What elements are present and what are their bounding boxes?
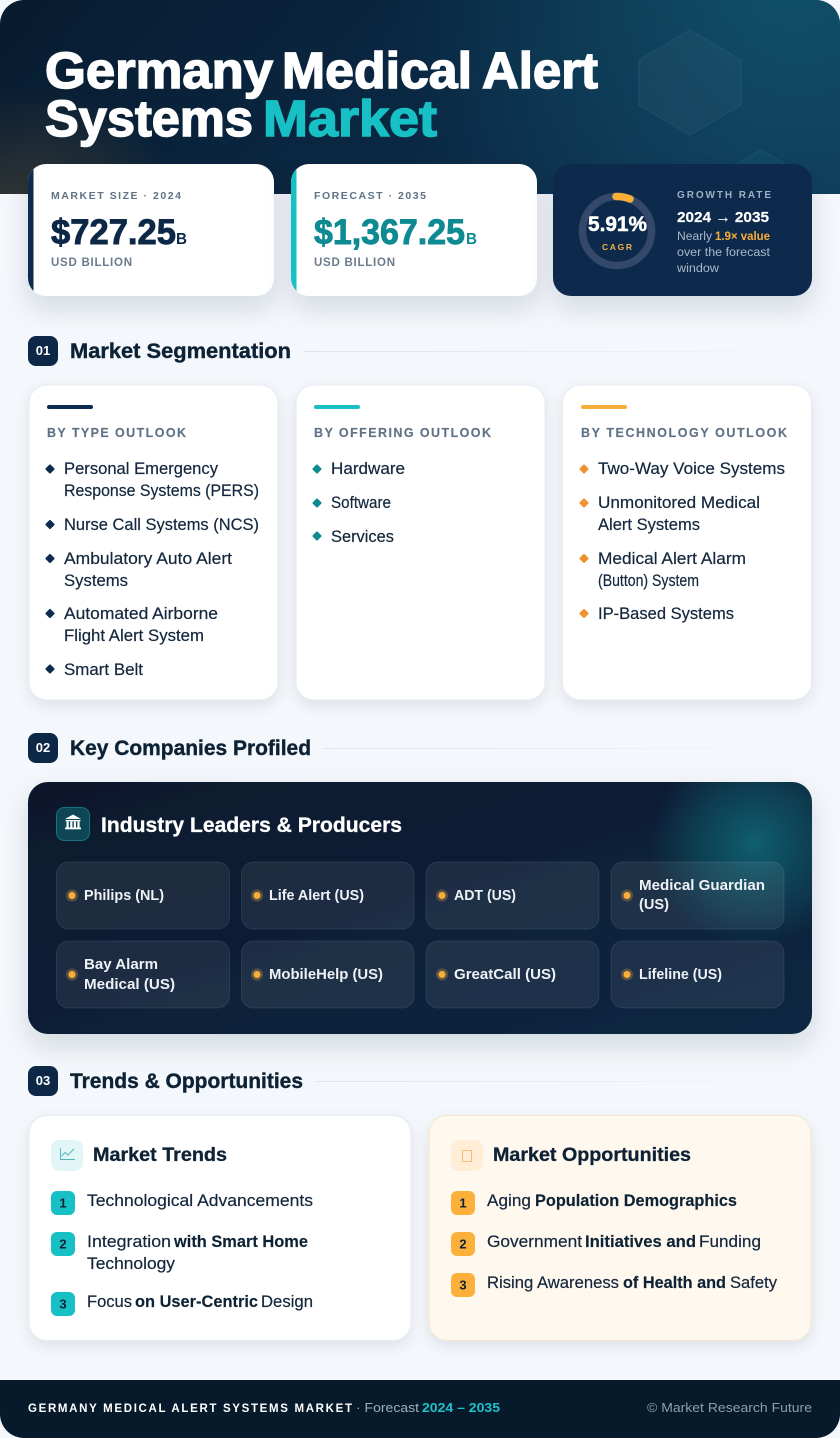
panel: market trends: Market Trends (93, 1145, 227, 1166)
header banner (0, 0, 840, 194)
section heading 01: Market Segmentation (70, 339, 291, 363)
company tile: Life Alert: Life Alert (US) (269, 887, 364, 904)
section heading 03: 03 (36, 1073, 50, 1088)
company tile: ADT: ADT (US) (454, 887, 516, 904)
opportunity 3: of Health and (623, 1274, 726, 1292)
panel: by offering outlook: Services (331, 528, 394, 546)
footer: GERMANY MEDICAL ALERT SYSTEMS MARKET (28, 1403, 352, 1415)
trend 3: Design (261, 1293, 313, 1311)
stat card: market size 2024: $727.25 (51, 213, 176, 252)
panel: by technology outlook: Medical Alert Alarm (598, 550, 746, 568)
section heading 03: Trends & Opportunities (70, 1069, 303, 1093)
trend 3: Focus (87, 1293, 132, 1311)
opportunity 2: Government (487, 1233, 582, 1251)
trend 2 (51, 1232, 308, 1273)
growth text: window (676, 263, 720, 275)
panel: market trends (29, 1116, 411, 1340)
company tile: MobileHelp: MobileHelp (US) (269, 966, 383, 983)
growth text: GROWTH RATE (677, 190, 771, 201)
opportunity 1 (451, 1191, 737, 1215)
trend 3: on User-Centric (135, 1293, 258, 1311)
title: Medical (282, 42, 472, 99)
footer: © Market Research Future (647, 1401, 812, 1415)
title: Alert (482, 42, 598, 99)
footer: 2024 – 2035 (422, 1401, 500, 1415)
panel: by technology outlook: IP-Based Systems (598, 605, 734, 623)
company tile: MobileHelp (242, 941, 414, 1008)
growth text: Nearly (677, 231, 712, 243)
section heading 01 (28, 336, 812, 366)
stat card: forecast 2035: $1,367.25 (314, 213, 465, 252)
opportunity 2: 2 (459, 1236, 467, 1252)
panel: by technology outlook: Two-Way Voice Systems (598, 460, 785, 478)
company tile: Bay Alarm Medical: Bay Alarm (84, 956, 158, 973)
decorative hexagon small (727, 150, 795, 194)
company tile: Bay Alarm Medical (56, 941, 230, 1008)
panel: by offering outlook: Hardware (331, 460, 405, 478)
stat card: market size 2024: USD BILLION (51, 257, 132, 269)
trend 3 (51, 1292, 313, 1316)
trend 3: 3 (59, 1296, 67, 1312)
company tile: GreatCall (426, 941, 599, 1008)
panel: by type outlook: Response Systems (PERS) (64, 482, 259, 500)
section heading 01: 01 (36, 343, 50, 358)
panel: by technology outlook: BY TECHNOLOGY OUTLOOK (581, 426, 787, 440)
panel: market opportunities: Market Opportunities (493, 1145, 691, 1166)
panel: by technology outlook: (Button) System (598, 572, 699, 590)
company tile: Philips: Philips (NL) (84, 887, 164, 904)
section heading 02 (28, 733, 812, 763)
growth text: 1.9× value (715, 231, 770, 243)
CAGR donut (582, 196, 652, 266)
panel: by technology outlook: Unmonitored Medical (598, 494, 760, 512)
company tile: GreatCall: GreatCall (US) (454, 966, 556, 983)
panel: by offering outlook: Software (331, 494, 391, 512)
panel: by type outlook: Flight Alert System (64, 627, 204, 645)
panel: market opportunities (429, 1116, 811, 1340)
trend 2: Integration (87, 1233, 171, 1251)
title (45, 42, 598, 147)
stat card: forecast 2035: FORECAST · 2035 (314, 190, 426, 202)
trend 2: with Smart Home (173, 1233, 308, 1251)
opportunity 1: 1 (459, 1196, 467, 1210)
trend 1 (51, 1191, 313, 1215)
company tile: Bay Alarm Medical: Medical (US) (84, 976, 175, 993)
trend 1: Technological Advancements (87, 1192, 313, 1210)
CAGR donut: CAGR (602, 242, 632, 252)
panel: by offering outlook: BY OFFERING OUTLOOK (314, 426, 491, 440)
panel: by type outlook: Personal Emergency (64, 460, 219, 478)
company tile: Medical Guardian: Medical Guardian (639, 877, 765, 894)
stat card: market size 2024 (28, 164, 274, 296)
opportunity 2: Initiatives and (585, 1233, 696, 1251)
panel: by type outlook: Ambulatory Auto Alert (64, 550, 232, 568)
opportunity 3: Rising Awareness (487, 1274, 619, 1292)
icon: bank (56, 808, 90, 840)
title: Systems (45, 90, 253, 147)
opportunity 2 (451, 1232, 761, 1256)
stat card: market size 2024: B (176, 231, 187, 248)
icon: missing glyph box (451, 1140, 483, 1171)
panel: by type outlook: Nurse Call Systems (NCS) (64, 516, 259, 534)
opportunity 3: Safety (730, 1274, 778, 1292)
panel: by type outlook: Smart Belt (64, 661, 143, 679)
title: Germany (45, 42, 274, 99)
panel: industry leaders (28, 782, 812, 1034)
stat card: growth rate (553, 164, 812, 296)
company tile: Philips (56, 862, 230, 929)
stat card: forecast 2035: USD BILLION (314, 257, 395, 269)
panel: by offering outlook (296, 385, 545, 700)
company tile: ADT (426, 862, 599, 929)
title: Market (263, 90, 437, 147)
company tile: Medical Guardian: (US) (639, 896, 669, 913)
panel: by type outlook: BY TYPE OUTLOOK (47, 426, 186, 440)
footer (0, 1380, 840, 1438)
company tile: Lifeline: Lifeline (US) (639, 966, 722, 983)
panel heading: Industry Leaders & Producers (101, 813, 402, 837)
company tile: Medical Guardian (611, 862, 784, 929)
opportunity 3 (451, 1273, 778, 1297)
section heading 02: Key Companies Profiled (70, 736, 311, 760)
panel: by technology outlook (562, 385, 812, 700)
panel: by type outlook: Systems (64, 572, 128, 590)
trend 1: 1 (59, 1196, 67, 1210)
company tile: Lifeline (611, 941, 784, 1008)
trend 2: 2 (59, 1236, 67, 1252)
stat card: market size 2024: MARKET SIZE · 2024 (51, 190, 181, 202)
icon: line chart (51, 1140, 83, 1171)
opportunity 2: Funding (699, 1233, 761, 1251)
panel: by technology outlook: Alert Systems (598, 516, 700, 534)
section heading 03 (28, 1066, 812, 1096)
company tile: Life Alert (242, 862, 414, 929)
opportunity 1: Aging (487, 1192, 531, 1210)
stat card: forecast 2035: B (466, 231, 477, 248)
trend 2: Technology (87, 1255, 176, 1273)
growth text: 2024 → 2035 (677, 209, 769, 226)
opportunity 1: Population Demographics (535, 1192, 737, 1210)
stat card: forecast 2035 (291, 164, 537, 296)
panel: by type outlook (29, 385, 278, 700)
decorative hexagon large (639, 30, 741, 135)
footer: · Forecast (356, 1401, 420, 1415)
section heading 02: 02 (36, 740, 50, 755)
growth text (676, 190, 771, 275)
panel: by type outlook: Automated Airborne (64, 605, 218, 623)
CAGR donut: 5.91% (588, 213, 647, 236)
growth text: over the forecast (677, 247, 771, 259)
opportunity 3: 3 (459, 1278, 467, 1292)
